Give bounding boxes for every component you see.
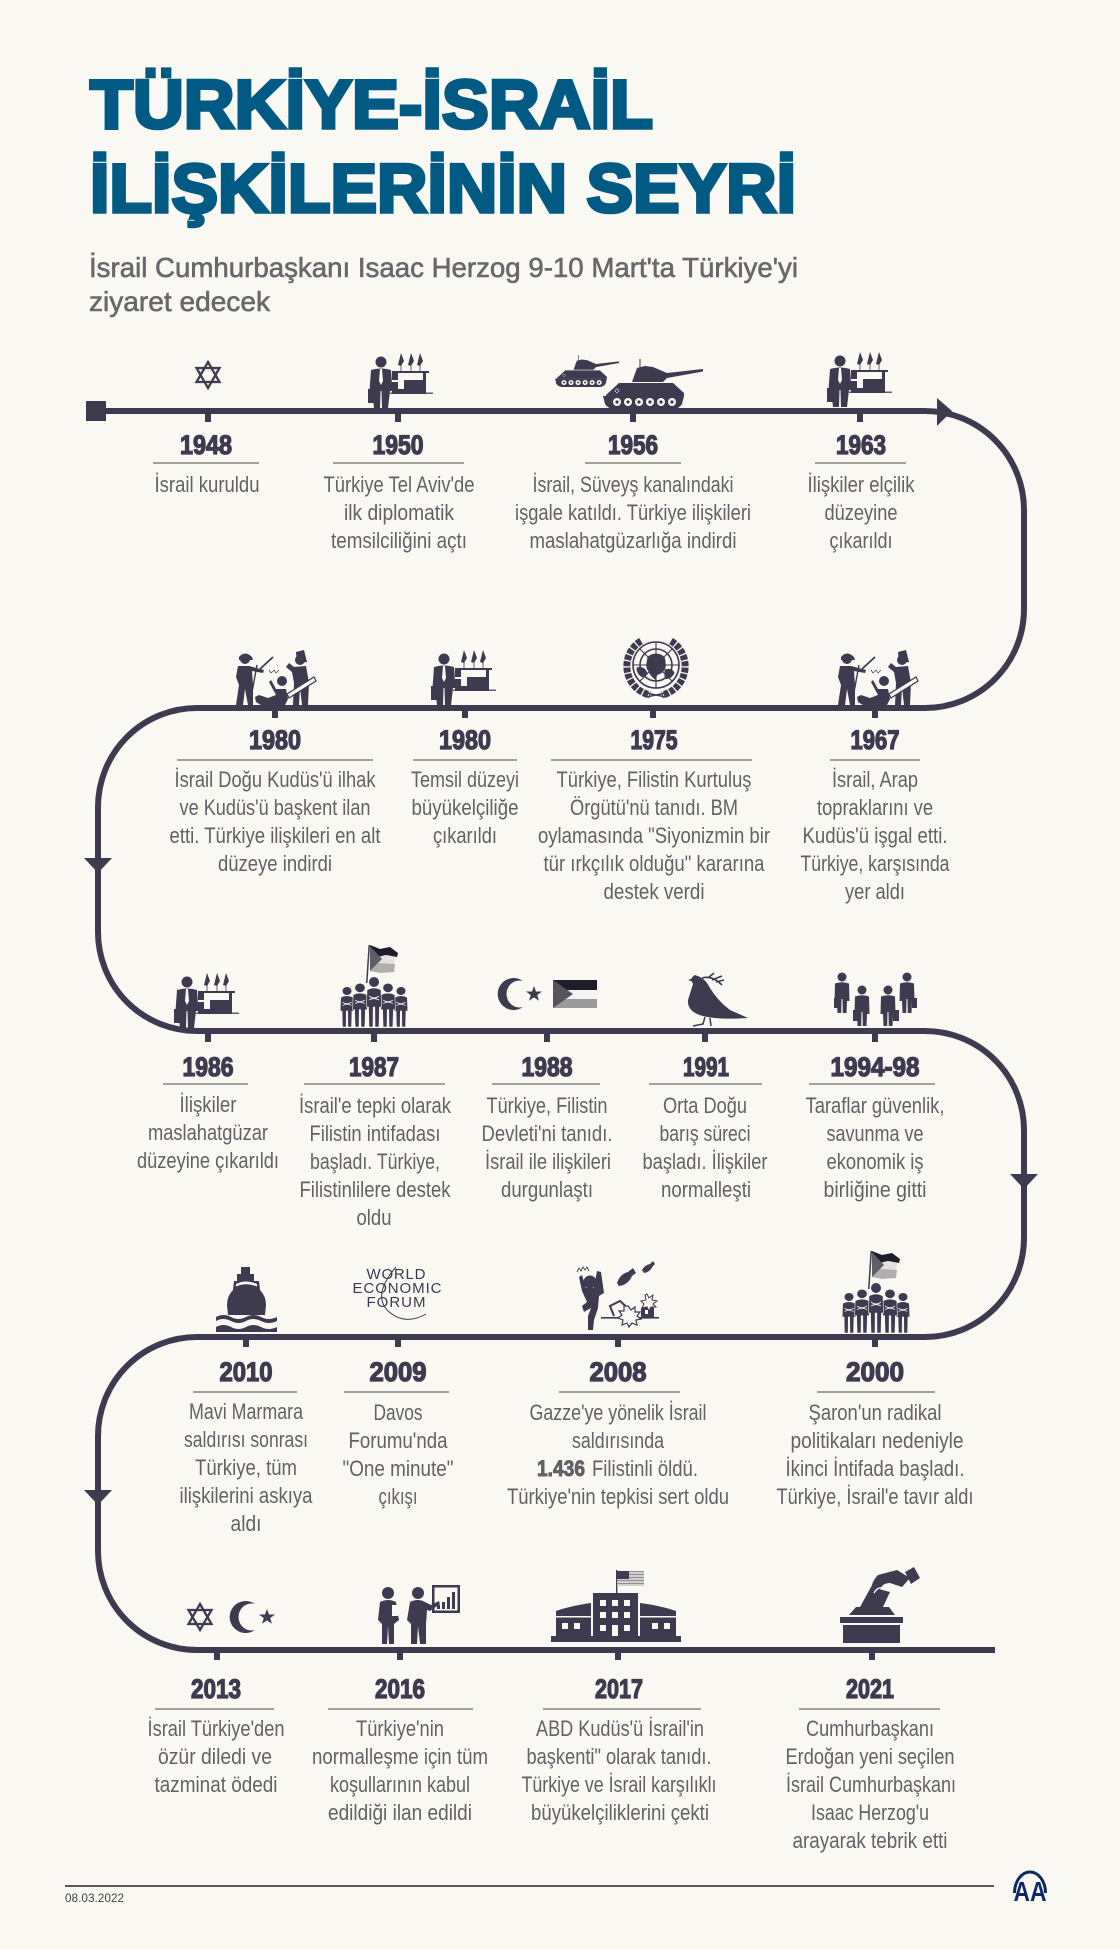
panel: 2008: 1.436: [537, 1456, 585, 1481]
panel: 2013: özür diledi ve: [158, 1744, 272, 1769]
panel: 2009: çıkışı: [378, 1484, 418, 1509]
panel: 1975: tür ırkçılık olduğu" kararına: [544, 851, 765, 876]
icon: United Nations emblem: [627, 641, 685, 697]
panel: 1980 representation: Temsil düzeyi: [411, 767, 519, 792]
panel: 1980 Jerusalem: düzeye indirdi: [218, 851, 332, 876]
panel: 1987: oldu: [356, 1205, 392, 1230]
footer: 08.03.2022: [65, 1891, 124, 1905]
panel: 1986: İlişkiler: [180, 1092, 236, 1117]
panel: 1986: [137, 973, 279, 1173]
panel: 1956: İsrail, Süveyş kanalındaki: [532, 472, 734, 497]
panel: 1967: [800, 650, 950, 904]
panel: 1987: 1987: [349, 1052, 399, 1082]
panel: 1988: 1988: [522, 1052, 572, 1082]
panel: 1986: düzeyine çıkarıldı: [137, 1148, 279, 1173]
panel: 2009: "One minute": [342, 1456, 454, 1481]
panel: 1956: işgale katıldı. Türkiye ilişkileri: [515, 500, 751, 525]
panel: 1967: yer aldı: [845, 879, 905, 904]
panel: 1956: 1956: [608, 430, 658, 460]
panel: 1980 representation: 1980: [439, 725, 491, 755]
panel: 1980 representation: büyükelçiliğe: [412, 795, 518, 820]
panel: 1956: [515, 355, 751, 553]
panel: 2010: Mavi Marmara: [189, 1399, 304, 1424]
panel: 1980 representation: [411, 650, 519, 848]
panel: 2000: 2000: [846, 1357, 904, 1387]
panel: 2010: ilişkilerini askıya: [180, 1483, 313, 1508]
panel: 2000: Şaron'un radikal: [808, 1400, 942, 1425]
panel: 1967: İsrail, Arap: [832, 767, 918, 792]
panel: 1980 Jerusalem: [170, 650, 380, 876]
panel: 1994-98: 1994-98: [830, 1052, 920, 1082]
panel: 2010: aldı: [230, 1511, 262, 1536]
panel: 2008: Filistinli öldü.: [592, 1456, 698, 1481]
panel: 2009: 2009: [370, 1357, 426, 1387]
panel: 2021: 2021: [846, 1674, 894, 1704]
panel: 2021: arayarak tebrik etti: [792, 1828, 948, 1853]
panel: 1988: durgunlaştı: [501, 1177, 593, 1202]
panel: 1950: [324, 353, 474, 553]
panel: 1987: Filistinlilere destek: [300, 1177, 451, 1202]
panel: 1988: Türkiye, Filistin: [486, 1093, 608, 1118]
panel: 1980 Jerusalem: 1980: [249, 725, 301, 755]
panel: 2008: Türkiye'nin tepkisi sert oldu: [507, 1484, 729, 1509]
panel: 1963: [808, 352, 915, 553]
panel: 1967: topraklarını ve: [817, 795, 933, 820]
panel: 2017: büyükelçiliklerini çekti: [531, 1800, 709, 1825]
panel: 2009: Forumu'nda: [348, 1428, 448, 1453]
panel: 2016: edildiği ilan edildi: [328, 1800, 472, 1825]
icon: embassy building with US flag: [551, 1570, 681, 1642]
panel: 1991: [642, 973, 768, 1202]
panel: 2000: İkinci İntifada başladı.: [786, 1456, 964, 1481]
icon: World Economic Forum logo: [352, 1266, 442, 1319]
panel: 2000: politikaları nedeniyle: [790, 1428, 964, 1453]
panel: 1991: 1991: [683, 1052, 729, 1082]
panel: 2010: 2010: [220, 1357, 272, 1387]
panel: 2021: Cumhurbaşkanı: [806, 1716, 934, 1741]
icon: diplomat and building: [174, 973, 239, 1028]
panel: 2010: saldırısı sonrası: [184, 1427, 308, 1452]
panel: 1967: Türkiye, karşısında: [800, 851, 950, 876]
panel: 1991: başladı. İlişkiler: [642, 1149, 768, 1174]
panel: 2000: [776, 1251, 974, 1509]
icon: diplomat and building: [431, 650, 496, 705]
panel: 2017: başkenti" olarak tanıdı.: [526, 1744, 712, 1769]
panel: 2013: İsrail Türkiye'den: [148, 1716, 284, 1741]
panel: 2013: [148, 1601, 284, 1797]
panel: 1975: 1975: [630, 725, 678, 755]
icon: crowd with Palestinian flag: [842, 1251, 910, 1333]
panel: 1987: Filistin intifadası: [310, 1121, 440, 1146]
panel: 1994-98: Taraflar güvenlik,: [806, 1093, 944, 1118]
icon: soldiers beating a man: [838, 650, 918, 707]
icon: World Economic Forum logo: FORUM: [366, 1294, 426, 1311]
subtitle: [89, 252, 798, 317]
panel: 2010: [180, 1267, 313, 1536]
icon: AA logo: AA: [1014, 1876, 1046, 1907]
icon: dove with olive branch: [688, 973, 748, 1026]
panel: 2017: [522, 1570, 716, 1825]
panel: 1975: oylamasında "Siyonizmin bir: [538, 823, 770, 848]
panel: 1963: çıkarıldı: [830, 528, 892, 553]
panel: 2008: saldırısında: [572, 1428, 665, 1453]
panel: 2016: koşullarının kabul: [330, 1772, 470, 1797]
panel: 2016: [312, 1585, 488, 1825]
panel: 1950: temsilciliğini açtı: [331, 528, 467, 553]
panel: 1950: Türkiye Tel Aviv'de: [324, 472, 474, 497]
panel: 2021: Erdoğan yeni seçilen: [786, 1744, 954, 1769]
panel: 1987: İsrail'e tepki olarak: [299, 1093, 452, 1118]
panel: 1963: İlişkiler elçilik: [808, 472, 915, 497]
panel: 1967: Kudüs'ü işgal etti.: [802, 823, 948, 848]
panel: 1975: Örgütü'nü tanıdı. BM: [570, 795, 738, 820]
panel: 1950: 1950: [372, 430, 424, 460]
panel: 2017: 2017: [595, 1674, 643, 1704]
icon: diplomat and building: [827, 352, 892, 407]
panel: 1956: maslahatgüzarlığa indirdi: [530, 528, 736, 553]
panel: 1963: düzeyine: [824, 500, 898, 525]
timeline path: [84, 398, 1038, 1660]
icon: four businessmen: [834, 972, 917, 1026]
panel: 1948: İsrail kuruldu: [154, 472, 260, 497]
panel: 1991: normalleşti: [661, 1177, 751, 1202]
panel: 2008: [507, 1261, 729, 1509]
panel: 1967: 1967: [850, 725, 900, 755]
panel: 1991: barış süreci: [660, 1121, 750, 1146]
icon: ship on waves: [216, 1267, 277, 1332]
panel: 1975: Türkiye, Filistin Kurtuluş: [556, 767, 752, 792]
panel: 1994-98: savunma ve: [826, 1121, 924, 1146]
subtitle: ziyaret edecek: [89, 286, 271, 317]
icon: crowd with Palestinian flag: [340, 945, 408, 1027]
title: [90, 66, 796, 227]
icon: falling person, bombs and explosion: [577, 1261, 659, 1330]
icon: two men and presentation board: [378, 1585, 460, 1644]
panel: 2016: 2016: [375, 1674, 425, 1704]
panel: 2017: ABD Kudüs'ü İsrail'in: [536, 1716, 704, 1741]
icon: star of David, crescent and star: [188, 1601, 275, 1633]
panel: 1987: başladı. Türkiye,: [310, 1149, 440, 1174]
subtitle: İsrail Cumhurbaşkanı Isaac Herzog 9-10 Mart'ta Türkiye'yi: [89, 252, 798, 283]
panel: 2000: Türkiye, İsrail'e tavır aldı: [776, 1484, 974, 1509]
panel: 1980 representation: çıkarıldı: [433, 823, 497, 848]
panel: 2010: Türkiye, tüm: [195, 1455, 297, 1480]
panel: 1988: [482, 978, 612, 1202]
panel: 1980 Jerusalem: ve Kudüs'ü başkent ilan: [180, 795, 370, 820]
panel: 1991: Orta Doğu: [663, 1093, 747, 1118]
icon: tanks: [555, 355, 703, 409]
panel: 1988: İsrail ile ilişkileri: [485, 1149, 611, 1174]
panel: 1975: destek verdi: [604, 879, 704, 904]
panel: 1987: [299, 945, 452, 1230]
panel: 2017: Türkiye ve İsrail karşılıklı: [522, 1772, 716, 1797]
footer: [65, 1872, 1046, 1907]
icon: World Economic Forum logo: ECONOMIC: [352, 1280, 442, 1297]
panel: 2009: [342, 1266, 454, 1509]
icon: soldiers beating a man: [236, 650, 316, 707]
panel: 1988: Devleti'ni tanıdı.: [482, 1121, 612, 1146]
panel: 1948: [153, 362, 260, 497]
panel: 1986: maslahatgüzar: [148, 1120, 268, 1145]
panel: 1986: 1986: [182, 1052, 234, 1082]
panel: 1948: 1948: [180, 430, 232, 460]
panel: 2008: 2008: [590, 1357, 646, 1387]
panel: 1950: ilk diplomatik: [344, 500, 455, 525]
panel: 1975: [538, 641, 770, 904]
icon: Turkish crescent and Palestinian flag: [498, 978, 597, 1010]
icon: hand casting vote into ballot box: [840, 1567, 920, 1643]
panel: 2016: Türkiye'nin: [356, 1716, 444, 1741]
panel: 1980 Jerusalem: etti. Türkiye ilişkileri en alt: [170, 823, 380, 848]
panel: 1994-98: [806, 972, 944, 1202]
panel: 2013: tazminat ödedi: [154, 1772, 278, 1797]
panel: 2009: Davos: [374, 1400, 422, 1425]
panel: 1994-98: birliğine gitti: [824, 1177, 926, 1202]
panel: 1963: 1963: [836, 430, 886, 460]
panel: 2021: Isaac Herzog'u: [811, 1800, 929, 1825]
icon: star of David: [196, 362, 220, 388]
panel: 2013: 2013: [191, 1674, 241, 1704]
title: TÜRKİYE-İSRAİL: [90, 66, 653, 143]
icon: World Economic Forum logo: WORLD: [366, 1266, 426, 1283]
panel: 2021: [786, 1567, 956, 1853]
panel: 2016: normalleşme için tüm: [312, 1744, 488, 1769]
title: İLİŞKİLERİNİN SEYRİ: [90, 150, 796, 227]
icon: diplomat and building: [368, 353, 433, 408]
panel: 1994-98: ekonomik iş: [826, 1149, 924, 1174]
panel: 2008: Gazze'ye yönelik İsrail: [530, 1400, 706, 1425]
panel: 2021: İsrail Cumhurbaşkanı: [786, 1772, 956, 1797]
panel: 1980 Jerusalem: İsrail Doğu Kudüs'ü ilhak: [174, 767, 376, 792]
